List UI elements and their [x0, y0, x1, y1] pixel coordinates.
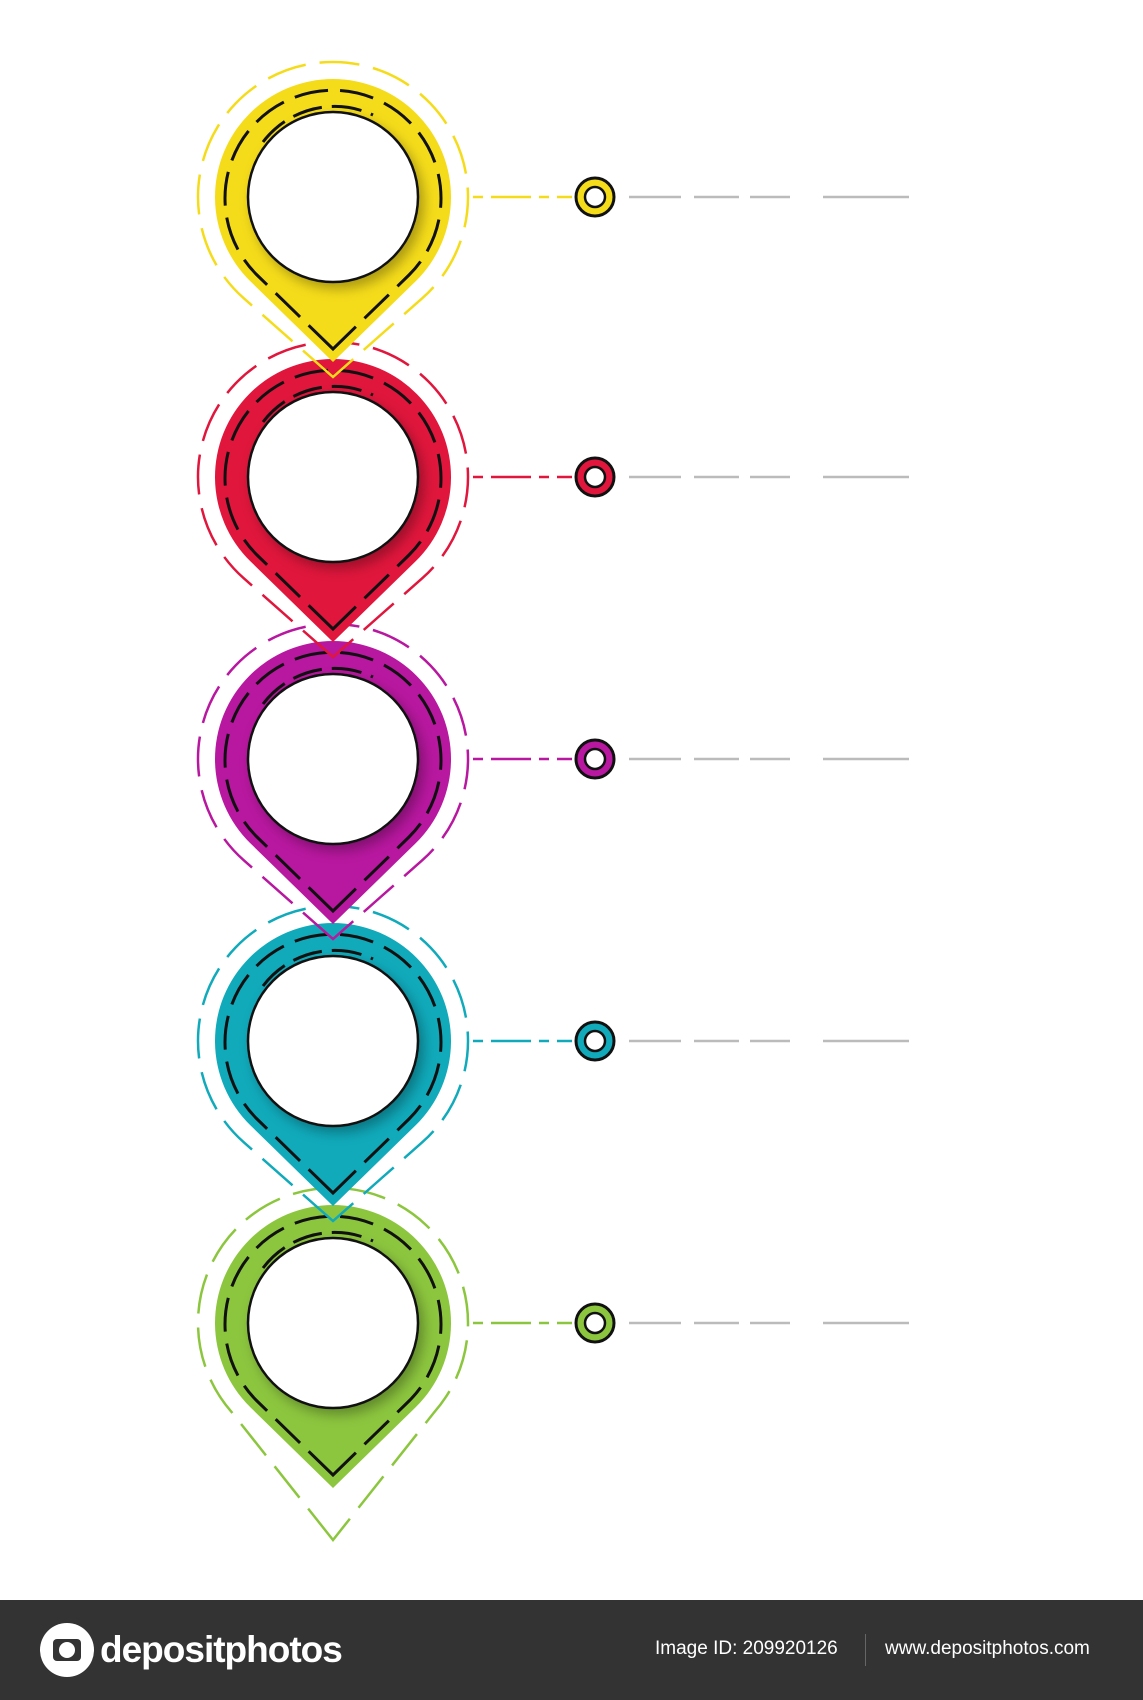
- footer image id: Image ID: 209920126: [655, 1638, 838, 1659]
- step 4 pin: teal: [198, 906, 909, 1221]
- step 3 pin: magenta: [198, 624, 909, 939]
- icon: camera logo: [40, 1623, 94, 1677]
- connector 3: [473, 740, 909, 778]
- footer logo: depositphotos: [100, 1629, 342, 1670]
- step 2 pin: red: [198, 342, 909, 657]
- step 1 pin: yellow: [198, 62, 909, 377]
- footer logo: [40, 1623, 342, 1677]
- footer bar: [0, 1600, 1143, 1700]
- connector 4: [473, 1022, 909, 1060]
- connector 5: [473, 1304, 909, 1342]
- connector 1: [473, 178, 909, 216]
- connector 2: [473, 458, 909, 496]
- step 5 pin: green: [198, 1188, 909, 1540]
- footer url: www.depositphotos.com: [885, 1638, 1090, 1659]
